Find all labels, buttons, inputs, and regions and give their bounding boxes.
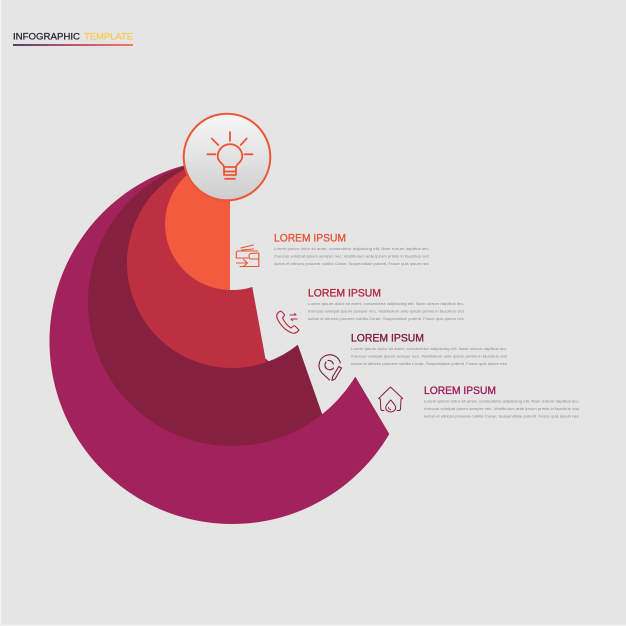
step 1 text [274,233,429,266]
step 4 text: Lorem ipsum dolor sit amet, consectetur adipiscing elit. Nam rutrum dapibus leo, [424,398,579,403]
segment 1: orange [165,158,232,290]
step 1 text: LOREM IPSUM [274,233,346,245]
icon: lightbulb [208,132,252,179]
icon: wallet [236,245,259,266]
segment 3: dark maroon [88,158,322,446]
step 3 text: rhoncus volutpat ipsum semper nec. Vestibulum ante ipsum primis in faucibus orci [351,354,507,358]
title: INFOGRAPHIC [13,32,80,42]
step 2 text: rhoncus volutpat ipsum semper nec. Vestibulum ante ipsum primis in faucibus orci [308,308,464,314]
top circle with lightbulb icon [184,114,270,200]
segment 4: outer purple [49,159,389,524]
step 4 text [424,385,579,418]
title [13,32,133,46]
step 4 text: LOREM IPSUM [424,385,496,397]
step 3 text: Lorem ipsum dolor sit amet, consectetur adipiscing elit. Nam rutrum dapibus leo, [351,346,507,351]
step 3 text: LOREM IPSUM [351,333,424,345]
step 3 text [351,333,507,366]
title: TEMPLATE [84,32,133,42]
step 1 text: rhoncus volutpat ipsum semper nec. Vestibulum ante ipsum primis in faucibus orci [274,254,429,258]
spiral chart [49,158,389,524]
step 1 text: luctus et ultrices posuere cubilia Curae; Suspendisse potenti. Fusce quis ipsum nec [274,261,429,266]
step 2 text [308,288,464,321]
step 1 text: Lorem ipsum dolor sit amet, consectetur adipiscing elit. Nam rutrum dapibus leo, [274,246,429,251]
icon: map pin [319,355,342,380]
icon: house with water drop [379,387,403,412]
step 2 text: LOREM IPSUM [308,288,381,300]
step 4 text: rhoncus volutpat ipsum semper nec. Vestibulum ante ipsum primis in faucibus orci [424,406,579,411]
step 3 text: luctus et ultrices posuere cubilia Curae; Suspendisse potenti. Fusce quis ipsum nec [351,361,507,366]
icon: phone [277,311,299,333]
step 4 text: luctus et ultrices posuere cubilia Curae; Suspendisse potenti. Fusce quis ipsum nec [424,413,579,418]
step 2 text: Lorem ipsum dolor sit amet, consectetur adipiscing elit. Nam rutrum dapibus leo, [308,301,464,306]
step 2 text: luctus et ultrices posuere cubilia Curae; Suspendisse potenti. Fusce quis ipsum nec [308,316,464,321]
segment 2: red [127,158,266,368]
